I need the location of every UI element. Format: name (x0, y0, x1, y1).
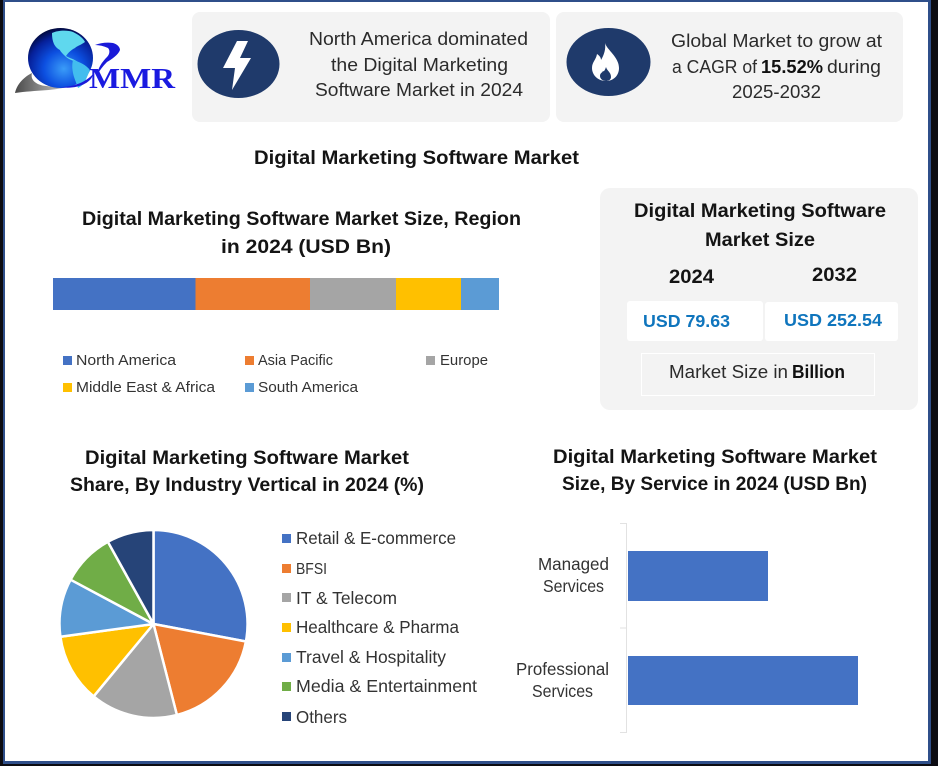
legend: industry vertical (282, 528, 477, 727)
year 2032 value (765, 265, 898, 341)
year 2024 value: 2024 (669, 267, 714, 288)
panel: CAGR callout (556, 12, 903, 122)
callout text: the Digital Marketing (331, 55, 508, 75)
pie chart: industry vertical (60, 530, 248, 718)
callout text: during (827, 57, 881, 77)
year 2024 value: USD 79.63 (643, 311, 730, 331)
unit note (642, 354, 874, 396)
callout text: North America dominated (309, 29, 528, 49)
axis labels: Professional (516, 659, 609, 679)
legend: industry vertical: Healthcare & Pharma (296, 617, 459, 637)
year 2032 value: 2032 (812, 265, 857, 286)
year 2024 value (627, 267, 763, 341)
unit note: Billion (792, 362, 845, 382)
heading: service chart: Digital Marketing Software Market (553, 447, 878, 468)
axis labels: Managed (538, 554, 609, 574)
callout text: Global Market to grow at (671, 31, 882, 51)
callout text (309, 29, 528, 100)
callout text: a CAGR of (672, 57, 758, 77)
heading: pie chart (70, 448, 424, 496)
legend: industry vertical: Others (296, 707, 347, 727)
panel: North America callout (192, 12, 550, 122)
legend: region: Europe (440, 352, 488, 369)
heading: pie chart: Digital Marketing Software Market (85, 448, 410, 469)
bar: professional services (628, 656, 858, 705)
legend: industry vertical: Retail & E-commerce (296, 528, 456, 548)
bar chart: service (516, 524, 858, 732)
heading: region chart (82, 209, 521, 258)
bar: managed services (628, 551, 768, 601)
unit note: Market Size in (669, 362, 788, 382)
callout text: Software Market in 2024 (315, 80, 523, 100)
legend: industry vertical: BFSI (296, 561, 327, 578)
heading: service chart (553, 447, 878, 495)
legend: industry vertical: Travel & Hospitality (296, 647, 446, 667)
panel heading: Market Size (705, 230, 815, 251)
main title: Digital Marketing Software Market (254, 148, 580, 169)
legend: region: South America (258, 379, 359, 396)
axis labels: Services (532, 681, 593, 701)
heading: region chart: Digital Marketing Software Market Size, Region (82, 209, 521, 230)
panel: market size (600, 188, 918, 410)
heading: pie chart: Share, By Industry Vertical in 2024 (%) (70, 475, 424, 496)
axis labels (516, 554, 609, 701)
legend: region (63, 352, 488, 396)
icon: flame (566, 28, 650, 96)
heading: service chart: Size, By Service in 2024 (USD Bn) (562, 474, 867, 495)
logo: MMR globe (15, 28, 176, 95)
stacked bar chart: region (53, 278, 499, 310)
legend: region: North America (76, 352, 177, 369)
year 2032 value: USD 252.54 (784, 310, 882, 330)
panel heading (634, 201, 886, 251)
legend: region: Asia Pacific (258, 352, 333, 369)
callout text: 2025-2032 (732, 82, 821, 102)
heading: region chart: in 2024 (USD Bn) (221, 237, 391, 258)
axis labels: Services (543, 576, 604, 596)
legend: industry vertical: IT & Telecom (296, 588, 397, 608)
legend: region: Middle East & Africa (76, 379, 216, 396)
callout text: 15.52% (761, 57, 823, 77)
icon: lightning bolt (198, 30, 280, 98)
logo wordmark: MMR (89, 64, 176, 95)
legend: industry vertical: Media & Entertainment (296, 676, 477, 696)
callout text (671, 31, 882, 102)
panel heading: Digital Marketing Software (634, 201, 886, 222)
